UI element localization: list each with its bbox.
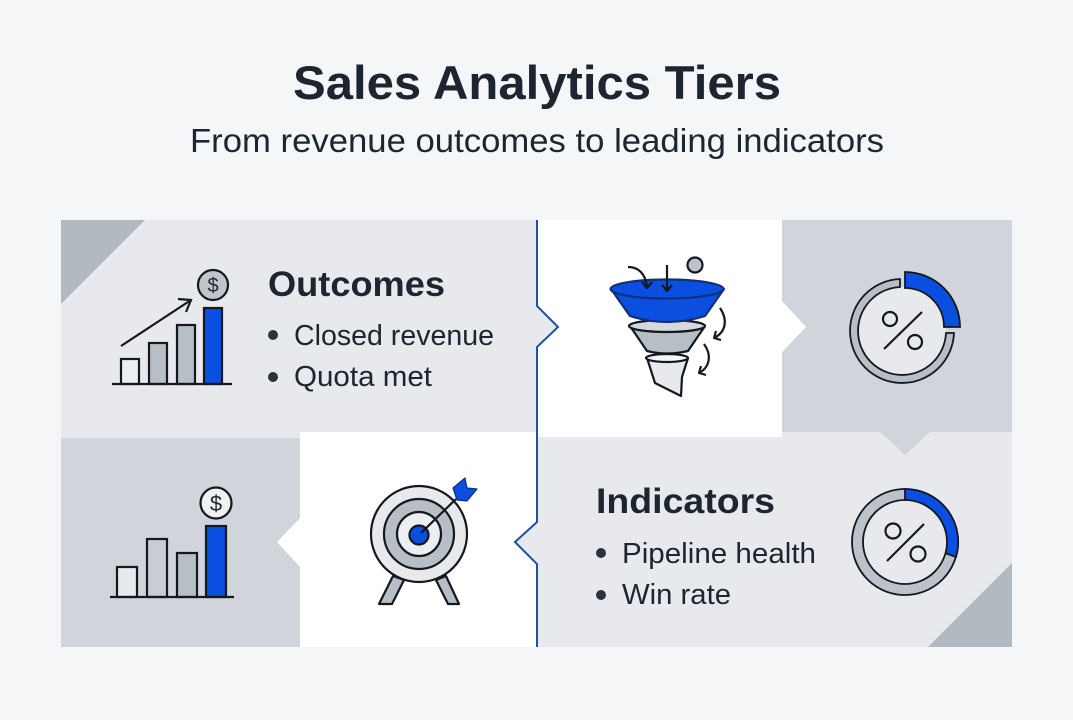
arrow: grey pointer down [880, 432, 930, 455]
icon: bar chart with dollar coin [110, 488, 234, 597]
icon: percent donut with blue arc [852, 489, 958, 595]
heading: outcomes: Outcomes [268, 265, 445, 304]
icon: rising bar chart with dollar coin: $ [207, 275, 219, 297]
panel: target [300, 432, 537, 647]
list: outcomes: Quota met [294, 361, 432, 393]
list: outcomes: Closed revenue [294, 320, 494, 352]
panel: funnel [537, 220, 782, 437]
list: indicators: Win rate [622, 579, 731, 611]
list: indicators [596, 538, 816, 611]
panel: top right percent [782, 220, 1012, 432]
list: outcomes [268, 320, 494, 393]
panel: outcomes [61, 220, 537, 438]
icon: percent dial with blue arc [850, 272, 960, 383]
arrow: white pointer right [782, 301, 806, 352]
list: indicators: Pipeline health [622, 538, 816, 570]
icon: funnel [610, 258, 725, 396]
subtitle: From revenue outcomes to leading indicators [190, 122, 884, 159]
panel: indicators [537, 432, 1012, 647]
icon: target with dart [371, 478, 477, 604]
heading: indicators: Indicators [596, 482, 775, 521]
panel: bottom left chart [61, 438, 300, 647]
divider: blue notched line [515, 220, 558, 647]
icon: bar chart with dollar coin: $ [210, 491, 222, 516]
arrow: white pointer left [277, 518, 300, 567]
title: Sales Analytics Tiers [293, 56, 781, 109]
icon: rising bar chart with dollar coin [112, 270, 232, 384]
